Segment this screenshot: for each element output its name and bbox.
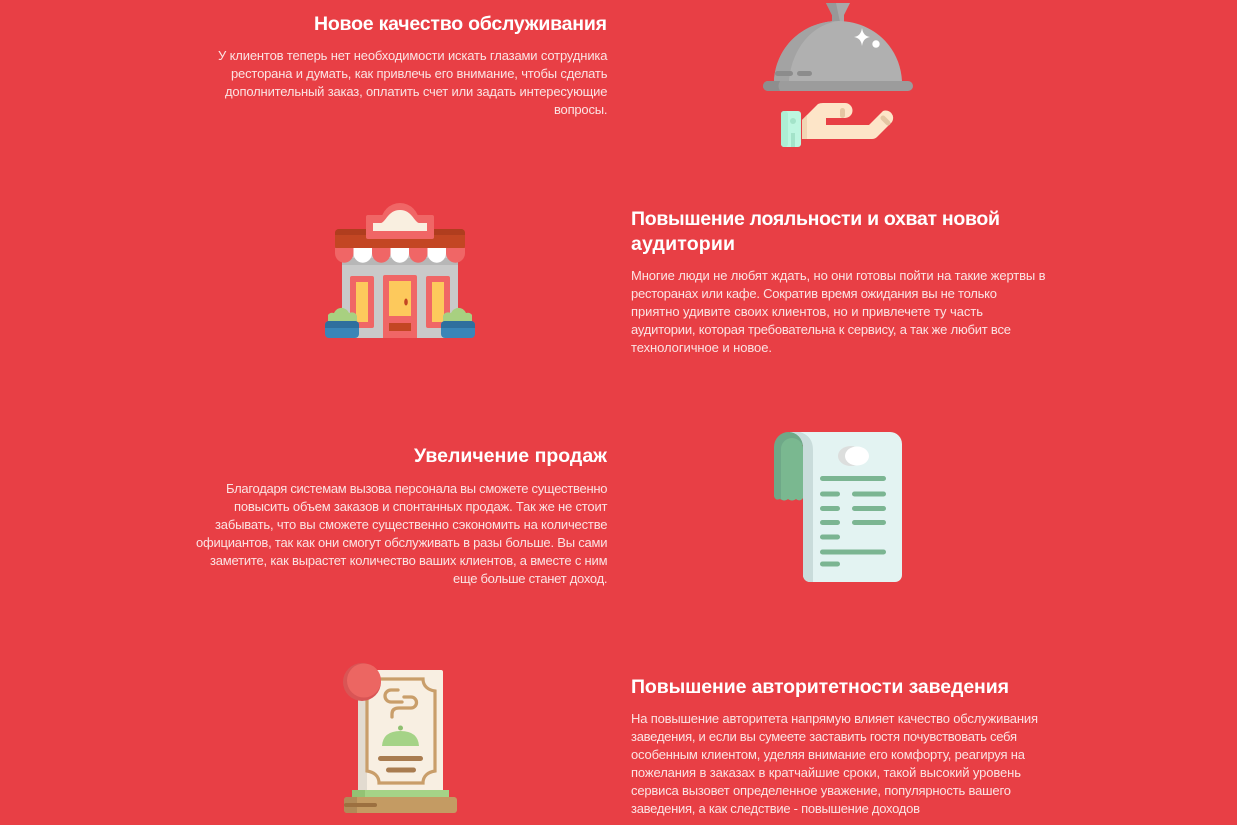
text block: authority: особенным клиентом, уделяя внимание его комфорту, реагируя на	[631, 747, 1026, 762]
text block: loyalty and new audience: ресторанах или кафе. Сократив время ожидания вы не только	[631, 286, 997, 301]
text block: sales growth: заметите, как вырастет количество ваших клиентов, а вместе с ним	[210, 553, 608, 568]
heading: loyalty and new audience: Повышение лояльности и охват новой	[631, 208, 1000, 230]
text block: authority: На повышение авторитета напрямую влияет качество обслуживания	[631, 711, 1038, 726]
text block: new service quality: У клиентов теперь нет необходимости искать глазами сотрудника	[218, 48, 608, 63]
text block: sales growth: официантов, так как они смогут обслуживать в разы больше. Вы сами	[196, 535, 608, 550]
text block: loyalty and new audience: Многие люди не любят ждать, но они готовы пойти на такие жертвы в	[631, 268, 1046, 283]
text block: sales growth: Благодаря системам вызова персонала вы сможете существенно	[226, 481, 608, 496]
icon: receipt scroll	[774, 432, 902, 582]
icon: menu stand	[343, 663, 457, 813]
text block: new service quality: вопросы.	[554, 102, 608, 117]
text block: authority: заведения, а как следствие - повышение доходов	[631, 801, 920, 816]
heading: loyalty and new audience	[631, 208, 1000, 255]
text block: sales growth: еще больше станет доход.	[453, 571, 608, 586]
heading: new service quality: Новое качество обслуживания	[314, 13, 607, 35]
text block: sales growth	[196, 481, 608, 586]
text block: new service quality: ресторана и думать, как привлечь его внимание, чтобы сделать	[231, 66, 608, 81]
text block: authority: заведения, и если вы сумеете заставить гостя почувствовать себя	[631, 729, 1017, 744]
text block: loyalty and new audience: аудитории, которая требовательна к сервису, а так же любит все	[631, 322, 1011, 337]
text block: sales growth: повысить объем заказов и спонтанных продаж. Так же не стоит	[234, 499, 608, 514]
text block: loyalty and new audience: технологичное и новое.	[631, 340, 772, 355]
text block: authority	[631, 711, 1038, 816]
heading: loyalty and new audience: аудитории	[631, 233, 735, 255]
text block: loyalty and new audience: приятно удивите своих клиентов, но и привлечете ту часть	[631, 304, 983, 319]
icon: cloche and hand	[763, 3, 913, 147]
text block: authority: сервиса вызовет определенное уважение, популярность вашего	[631, 783, 1011, 798]
text block: new service quality	[218, 48, 608, 117]
text block: sales growth: забывать, что вы сможете существенно сэкономить на количестве	[215, 517, 608, 532]
heading: authority: Повышение авторитетности заведения	[631, 676, 1009, 698]
text block: new service quality: дополнительный заказ, оплатить счет или задать интересующие	[225, 84, 608, 99]
icon: restaurant building	[325, 203, 475, 338]
text block: loyalty and new audience	[631, 268, 1046, 355]
heading: sales growth: Увеличение продаж	[414, 445, 607, 467]
text block: authority: пожелания в заказах в кратчайшие сроки, такой высокий уровень	[631, 765, 1021, 780]
